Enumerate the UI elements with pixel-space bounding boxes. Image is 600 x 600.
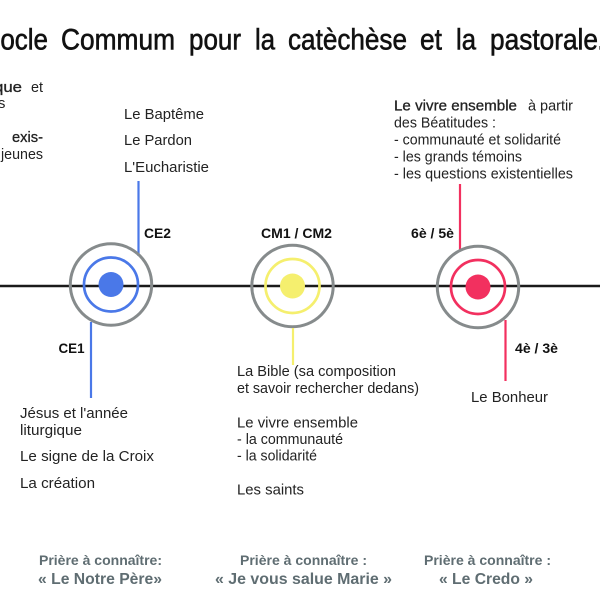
text block: 6e / 5e topics: Le vivre ensemble (394, 98, 517, 114)
text block: clipped left column: et (31, 80, 43, 96)
title: la (255, 24, 275, 56)
text block: CM1 / CM2 topics (237, 364, 419, 498)
connector: 6e / 5e (459, 184, 461, 250)
text block: CM1 / CM2 topics: - la communauté (237, 432, 343, 448)
title (0, 24, 600, 56)
text block: CM1 / CM2 topics: - la solidarité (237, 448, 317, 464)
text block: CE2 topics: Le Pardon (124, 133, 192, 149)
text block: 6e / 5e topics: à partir (528, 98, 573, 114)
marker: 6e / 5e (437, 246, 519, 328)
title: Commum (61, 24, 175, 56)
text block: CE2 topics: Le Baptême (124, 107, 204, 123)
text block: CM1 / CM2 topics: Le vivre ensemble (237, 416, 358, 432)
title: et (420, 24, 443, 56)
prayer: Le Credo (424, 552, 551, 588)
text block: 4e / 3e topics: Le Bonheur (471, 390, 548, 406)
text block: CM1 / CM2 topics: et savoir rechercher dedans) (237, 381, 419, 397)
text block: CE2 topics (124, 107, 209, 176)
prayer: Le Notre Père: Prière à connaître: (39, 552, 162, 568)
marker: CM1 / CM2 (252, 245, 333, 327)
text block: 6e / 5e topics: - les grands témoins (394, 150, 522, 166)
text block: CM1 / CM2 topics: La Bible (sa composition (237, 364, 396, 380)
marker: CE1 / CE2 (70, 244, 152, 325)
connector: CE2 (137, 181, 140, 256)
label: CE2: CE2 (144, 225, 171, 241)
title: catèchèse (288, 24, 407, 56)
prayer: Le Notre Père (38, 552, 162, 588)
text block: CE1 topics: Le signe de la Croix (20, 449, 155, 465)
title: la (456, 24, 476, 56)
text block: CM1 / CM2 topics: Les saints (237, 482, 304, 498)
prayer: Le Credo: « Le Credo » (439, 571, 533, 588)
connector: CE1 (90, 322, 92, 398)
text block: CE1 topics: Jésus et l'année (20, 406, 128, 422)
label: CM1 / CM2: CM1 / CM2 (261, 225, 332, 241)
title: pour (189, 24, 241, 56)
text block: CE1 topics: La création (20, 476, 95, 492)
text block: clipped left column (0, 80, 43, 163)
text block: CE1 topics: liturgique (20, 423, 82, 439)
prayer: Je vous salue Marie (215, 552, 392, 588)
label: 6e / 5e: 6è / 5è (411, 225, 454, 241)
text block: 6e / 5e topics: des Béatitudes : (394, 116, 496, 132)
text block: clipped left column: jeunes (0, 147, 43, 163)
prayer: Je vous salue Marie: « Je vous salue Marie » (215, 571, 392, 588)
text block: CE1 topics (20, 406, 155, 492)
prayer: Je vous salue Marie: Prière à connaître : (240, 552, 367, 568)
label: CE1: CE1 (58, 340, 85, 356)
prayer: Le Notre Père: « Le Notre Père» (38, 571, 162, 588)
timeline axis (0, 285, 600, 287)
text block: CE2 topics: L'Eucharistie (124, 160, 209, 176)
text block: 6e / 5e topics (394, 98, 573, 182)
connector: 4e / 3e (504, 320, 507, 381)
label: 4e / 3e: 4è / 3è (515, 340, 558, 356)
text block: 6e / 5e topics: - les questions existentielles (394, 166, 573, 182)
prayer: Le Credo: Prière à connaître : (424, 552, 551, 568)
text block: 6e / 5e topics: - communauté et solidarité (394, 132, 561, 148)
connector: CM1 / CM2 (292, 328, 294, 365)
text block: clipped left column: exis- (12, 130, 43, 146)
